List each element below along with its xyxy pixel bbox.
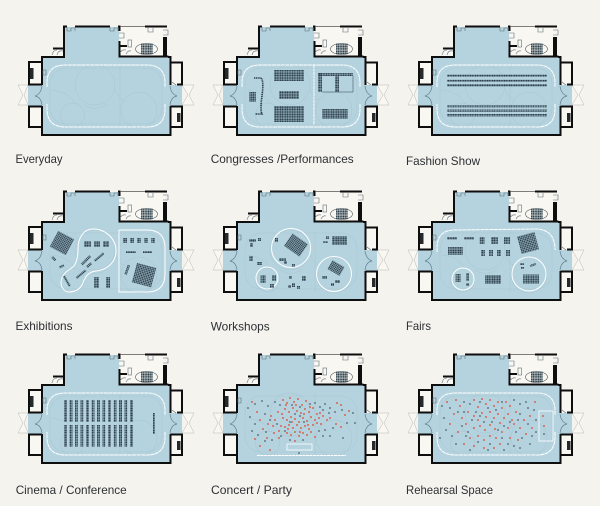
panel: fashion show floor plan [408, 26, 584, 135]
label: concert: Concert / Party [211, 483, 292, 497]
label: rehearsal: Rehearsal Space [406, 483, 493, 497]
crowd [248, 398, 355, 453]
label: fairs: Fairs [406, 319, 431, 333]
crowd [440, 399, 544, 450]
panel: workshops floor plan [213, 192, 389, 300]
label: everyday: Everyday [16, 152, 62, 166]
panel: exhibitions floor plan [18, 192, 194, 300]
panel: congresses floor plan [213, 26, 389, 135]
panel: fairs floor plan [408, 192, 584, 300]
panel: rehearsal floor plan [408, 354, 584, 463]
label: cinema: Cinema / Conference [16, 483, 127, 497]
label: workshops: Workshops [211, 320, 270, 334]
panel: concert floor plan [213, 354, 389, 463]
label: exhibitions: Exhibitions [16, 319, 72, 333]
panel: everyday floor plan [18, 26, 194, 135]
label: fashion show: Fashion Show [406, 154, 480, 168]
label: congresses: Congresses /Performances [211, 152, 354, 166]
panel: cinema floor plan [18, 354, 194, 463]
